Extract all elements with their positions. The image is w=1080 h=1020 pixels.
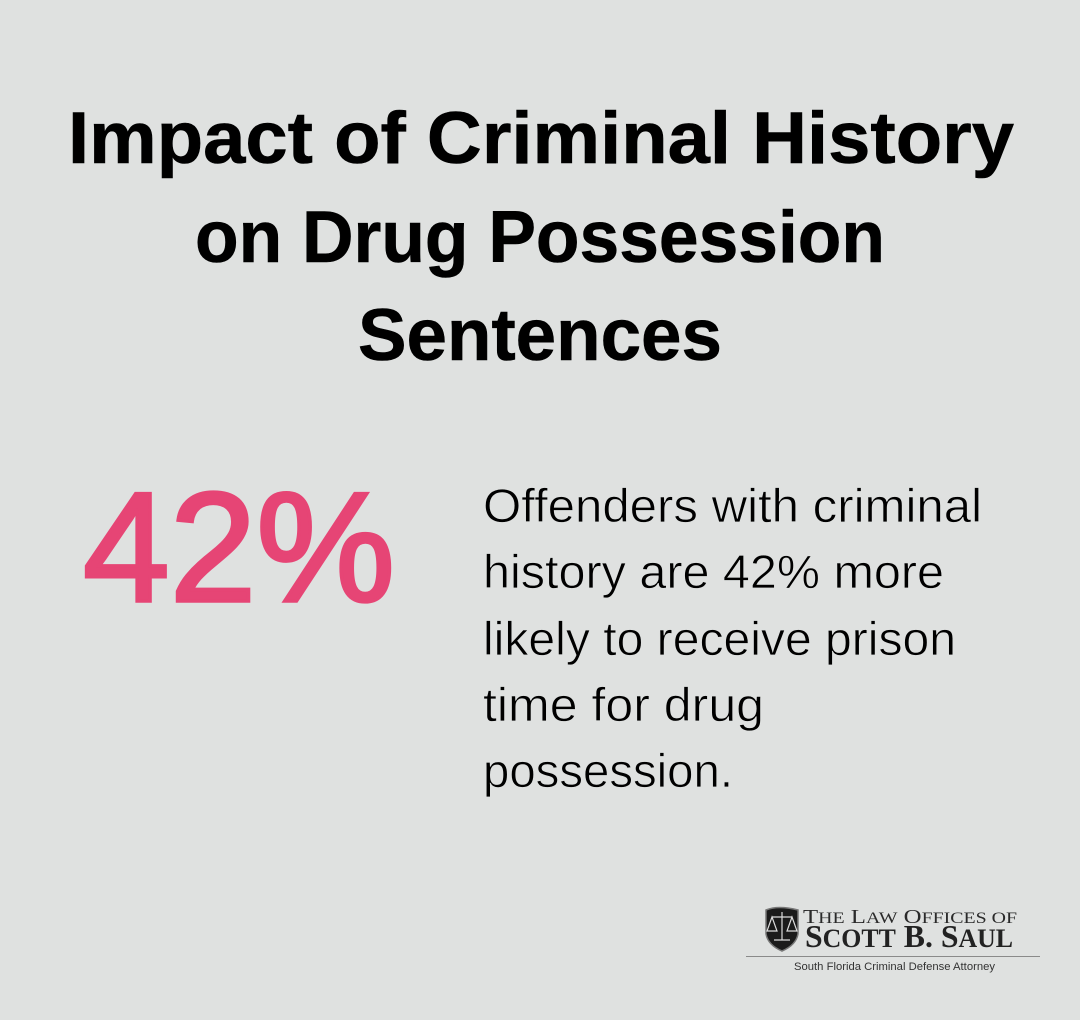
description text: Offenders with criminal: [483, 479, 982, 532]
description text: likely to receive prison: [483, 612, 956, 665]
icon: shield with scales: [766, 908, 798, 951]
logo firm name line 1: THE L AW O FFICES OF: [803, 906, 1017, 928]
big statistic: 42%: 42%: [83, 461, 395, 635]
logo: The Law Offices of Scott B. Saul: [746, 906, 1040, 973]
description text: time for drug: [483, 678, 764, 731]
description text: [483, 479, 982, 797]
logo firm name line 2: SCOTT B. SAUL: [805, 918, 1013, 954]
description text: possession.: [483, 744, 733, 797]
title: [68, 98, 1014, 376]
title: Sentences: [358, 295, 722, 376]
title: on Drug Possession: [195, 197, 885, 278]
description text: history are 42% more: [483, 545, 944, 598]
title: Impact of Criminal History: [68, 98, 1014, 179]
logo tagline: South Florida Criminal Defense Attorney: [794, 961, 996, 973]
